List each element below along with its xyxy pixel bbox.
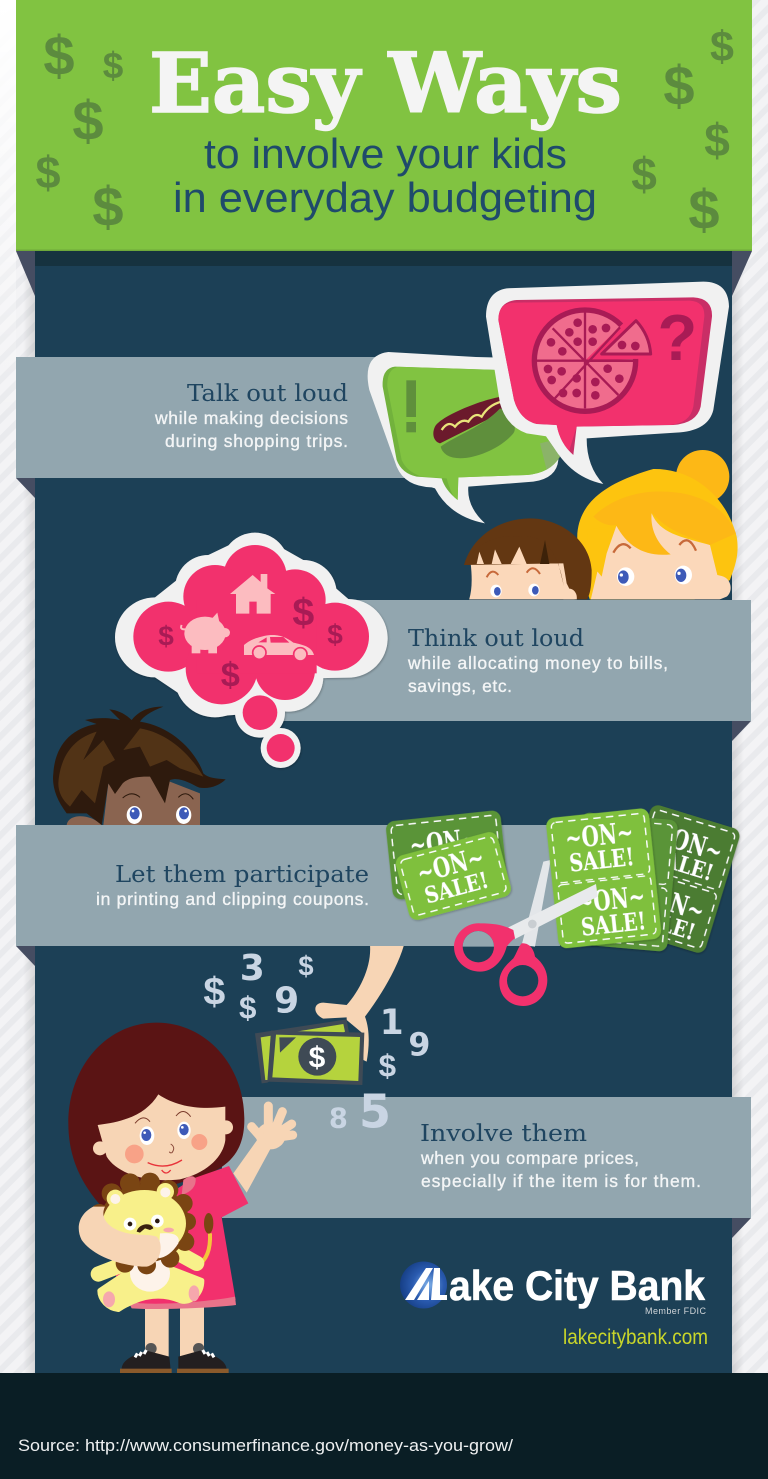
subtitle — [173, 130, 597, 221]
legs — [145, 1307, 204, 1358]
coupon stack front: SALE! — [580, 906, 647, 942]
dollar icons: $ — [292, 590, 314, 634]
speech bubbles — [368, 282, 729, 523]
icon: car — [244, 635, 314, 661]
source line: Source: http://www.consumerfinance.gov/money-as-you-grow/ — [18, 1436, 513, 1455]
flying numbers and dollars: $ — [379, 1049, 396, 1084]
coupon stack back: SALE! — [648, 844, 716, 887]
flying numbers and dollars: $ — [203, 970, 225, 1014]
hugging arm — [79, 1207, 161, 1267]
pizza — [534, 310, 653, 411]
question mark: ? — [657, 301, 697, 374]
coupon stack back: ~ON~ — [652, 819, 726, 869]
ribbon 2: think out loud: while allocating money to bills, — [407, 653, 668, 673]
dollar sign pattern — [35, 23, 734, 241]
dollar icons — [158, 590, 343, 694]
hair — [68, 1023, 244, 1208]
face — [93, 1094, 233, 1180]
dollar sign pattern: $ — [688, 178, 720, 241]
ribbon 2: think out loud — [270, 600, 751, 721]
flying numbers and dollars: 9 — [408, 1028, 430, 1064]
coupon stack front: SALE! — [568, 842, 636, 878]
flying numbers and dollars: 1 — [380, 1003, 404, 1043]
dollar sign pattern: $ — [710, 23, 734, 71]
icon: house — [230, 574, 275, 614]
bank logo — [400, 1262, 708, 1349]
lion head — [103, 1190, 186, 1257]
small coupon back: ~ON~ — [408, 824, 479, 862]
ribbon 1: talk out loud: while making decisions — [154, 408, 348, 428]
coupons and scissors — [385, 803, 742, 1006]
green hot dog bubble — [368, 352, 567, 523]
flying numbers and dollars — [203, 948, 430, 1138]
flying numbers and dollars: 3 — [240, 948, 265, 989]
lion tail — [197, 1233, 210, 1267]
coupon stack middle — [570, 812, 678, 952]
raised arm and hand — [233, 1106, 293, 1193]
coupon stack back — [614, 803, 742, 955]
ribbon 4: involve them: when you compare prices, — [420, 1148, 639, 1168]
ribbon 3: let them participate: in printing and clipping coupons. — [96, 889, 369, 909]
small coupon front: SALE! — [422, 868, 491, 910]
ribbon folds — [16, 478, 751, 1238]
arm reaching from ribbon 3 with cash — [255, 945, 404, 1085]
small coupon front — [394, 830, 513, 922]
two kids peeking — [464, 450, 738, 600]
lion toy — [79, 1173, 213, 1309]
ribbon 4: involve them — [222, 1097, 751, 1218]
exclamation mark — [406, 380, 416, 432]
flying numbers and dollars: 5 — [359, 1084, 391, 1138]
dress — [113, 1166, 248, 1309]
flying numbers and dollars: 9 — [274, 981, 299, 1022]
coupon stack front: ~ON~ — [563, 816, 635, 856]
footer bar — [0, 1373, 768, 1479]
header banner — [16, 0, 752, 251]
ribbon 2: think out loud: Think out loud — [408, 626, 584, 652]
ribbon 4: involve them: Involve them — [420, 1121, 587, 1147]
brunette kid — [464, 518, 592, 600]
thought cloud — [115, 533, 388, 768]
cash bills: $ — [309, 1041, 326, 1074]
scissors — [454, 884, 598, 1006]
ribbon 1: talk out loud — [16, 357, 516, 478]
dollar sign pattern: $ — [103, 45, 124, 86]
flying numbers and dollars: $ — [239, 990, 256, 1025]
globe mark — [400, 1262, 447, 1308]
small coupon back — [385, 810, 508, 900]
title: Easy Ways — [149, 36, 622, 132]
small coupon front: ~ON~ — [414, 842, 488, 890]
blade behind coupons — [522, 860, 551, 947]
coupon stack back: SALE! — [630, 903, 698, 946]
ribbon 1: talk out loud: during shopping trips. — [165, 431, 348, 451]
coupon stack back: ~ON~ — [634, 878, 708, 928]
subtitle: to involve your kids — [204, 130, 567, 177]
website: lakecitybank.com — [563, 1326, 708, 1349]
coupon stack front — [545, 808, 662, 949]
lion body — [100, 1268, 202, 1309]
dollar icons: $ — [158, 620, 174, 651]
boy peeking above ribbon 3 — [53, 707, 226, 825]
dollar sign pattern: $ — [631, 148, 657, 200]
dollar icons: $ — [327, 619, 343, 650]
dollar sign pattern: $ — [704, 114, 730, 166]
dollar sign pattern: $ — [35, 147, 61, 198]
main navy panel — [35, 251, 732, 1373]
shoes — [120, 1343, 229, 1373]
dollar sign pattern: $ — [92, 175, 124, 238]
girl holding lion — [68, 1023, 293, 1373]
blonde kid — [577, 450, 738, 600]
dollar sign pattern: $ — [43, 24, 75, 87]
lion mane — [90, 1173, 196, 1274]
banner folds — [16, 251, 752, 296]
hot dog — [433, 397, 515, 458]
ribbon 1: talk out loud: Talk out loud — [187, 381, 348, 407]
member text: Member FDIC — [645, 1306, 706, 1316]
coupon stack front: ~ON~ — [575, 880, 647, 920]
dollar sign pattern: $ — [663, 54, 695, 117]
flying numbers and dollars: $ — [298, 950, 314, 981]
pink pizza bubble — [486, 282, 729, 484]
dollar sign pattern: $ — [72, 89, 104, 152]
bank name: ake City Bank — [449, 1262, 706, 1309]
ribbon 3: let them participate: Let them participate — [115, 862, 369, 888]
icon: piggy bank — [181, 613, 230, 653]
cash bills — [255, 1019, 364, 1085]
flying numbers and dollars: 8 — [329, 1103, 348, 1134]
dollar icons: $ — [221, 656, 240, 694]
ribbon 3: let them participate — [16, 825, 560, 946]
ribbon 4: involve them: especially if the item is for them. — [421, 1171, 701, 1191]
ribbon 2: think out loud: savings, etc. — [408, 676, 512, 696]
subtitle: in everyday budgeting — [173, 174, 597, 221]
hand and arm — [315, 945, 404, 1062]
